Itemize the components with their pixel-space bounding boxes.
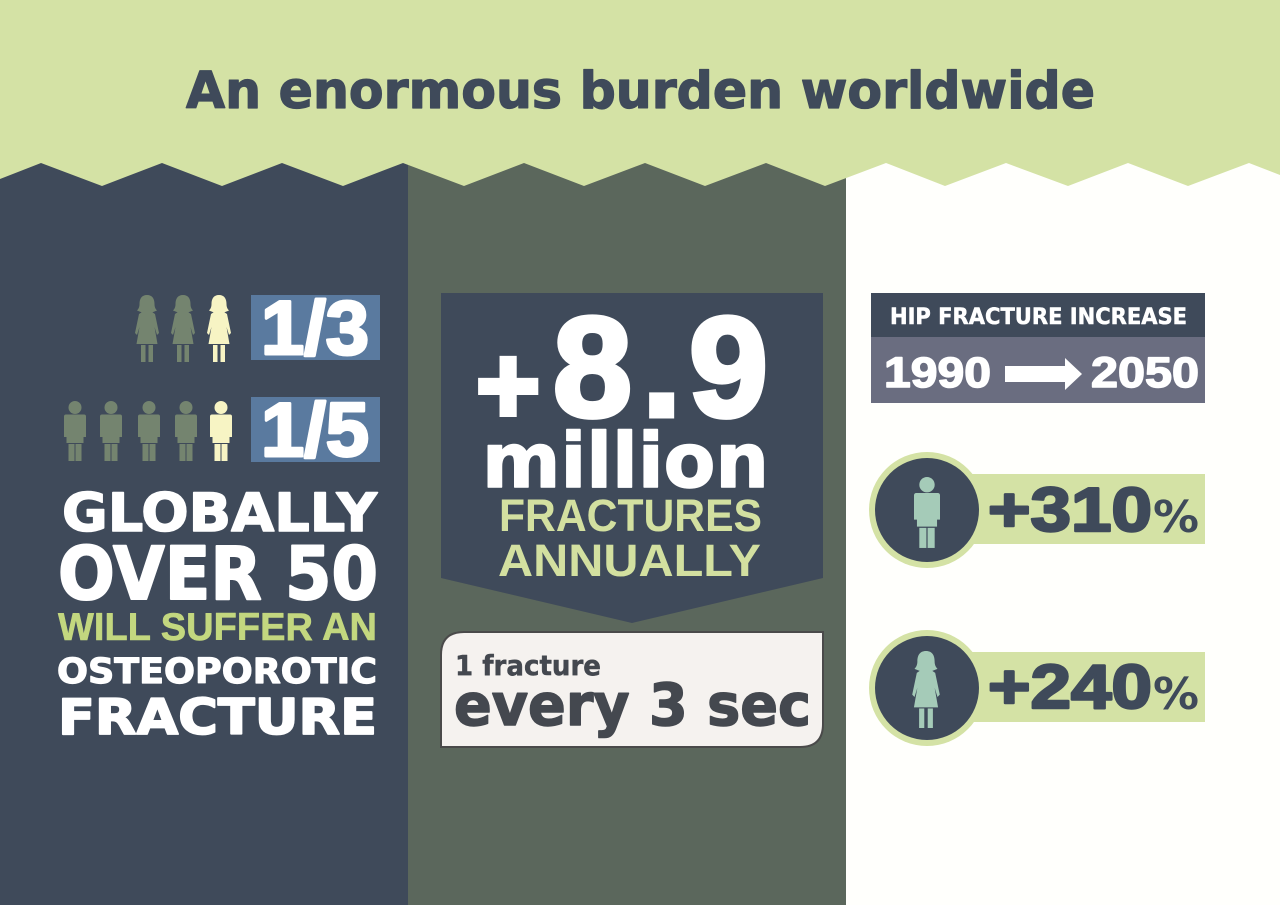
timeline: 1990 to 2050: 2050 xyxy=(1091,349,1199,397)
text block: globally over 50: FRACTURE xyxy=(58,689,377,746)
stat: women plus 240 percent: % xyxy=(1153,669,1199,720)
banner: 8.9 million fractures annually: + xyxy=(476,324,540,447)
callout: one fracture every 3 seconds xyxy=(441,632,823,747)
text block: globally over 50: OVER 50 xyxy=(58,532,378,617)
heading: hip fracture increase: HIP FRACTURE INCREASE xyxy=(890,305,1187,330)
banner: 8.9 million fractures annually: million xyxy=(482,416,769,505)
stat: women plus 240 percent: +240 xyxy=(988,653,1152,722)
title: An enormous burden worldwide xyxy=(186,62,1095,121)
callout: one fracture every 3 seconds: 1 fracture xyxy=(455,649,601,682)
text block: globally over 50: GLOBALLY xyxy=(62,483,378,544)
text block: globally over 50: OSTEOPOROTIC xyxy=(57,652,377,692)
banner: 8.9 million fractures annually: ANNUALLY xyxy=(498,535,761,586)
stat: women plus 240 percent xyxy=(869,630,1205,746)
panel: global risk xyxy=(0,160,408,905)
text block: globally over 50: WILL SUFFER AN xyxy=(58,606,377,649)
panel: annual fractures xyxy=(408,160,846,905)
stat: men plus 310 percent: +310 xyxy=(988,476,1152,545)
stat: men plus 310 percent: % xyxy=(1153,492,1199,543)
banner: 8.9 million fractures annually xyxy=(441,288,823,623)
header band with zigzag edge xyxy=(0,0,1280,186)
women pictogram: one in three xyxy=(135,295,231,362)
timeline: 1990 to 2050 xyxy=(871,337,1205,403)
timeline: 1990 to 2050: 1990 xyxy=(884,349,991,397)
heading: hip fracture increase xyxy=(871,293,1205,337)
banner: 8.9 million fractures annually: . xyxy=(642,288,681,447)
arrow xyxy=(1005,358,1082,390)
text block: globally over 50 xyxy=(57,483,378,746)
banner: 8.9 million fractures annually: 8 xyxy=(553,288,632,447)
callout: one fracture every 3 seconds: every 3 sec xyxy=(454,671,811,739)
banner: 8.9 million fractures annually: FRACTURES xyxy=(499,490,762,541)
icon: woman xyxy=(912,651,940,728)
stat: 1/3: 1/3 xyxy=(261,286,369,371)
stat: 1/5: 1/5 xyxy=(261,388,369,473)
banner: 8.9 million fractures annually: 9 xyxy=(689,288,768,447)
men pictogram: one in five xyxy=(64,401,232,461)
stat: men plus 310 percent xyxy=(869,452,1205,568)
icon: man xyxy=(914,477,940,548)
panel: hip fracture increase xyxy=(869,293,1205,746)
